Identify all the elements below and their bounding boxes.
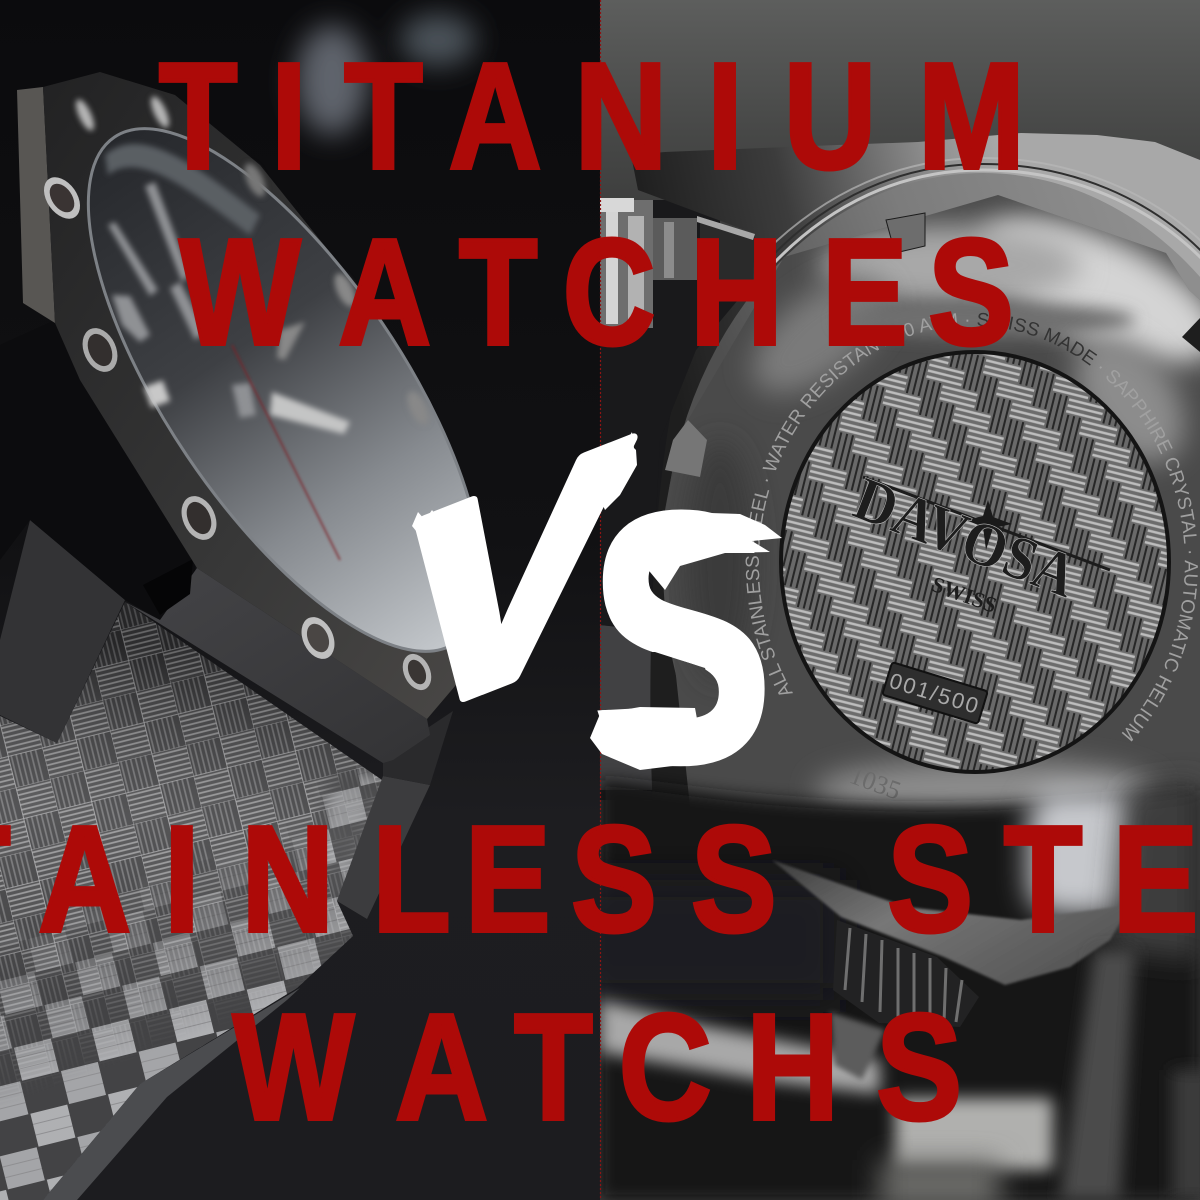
lower bracelet piece [600,625,652,790]
title line one: TITANIUM [159,31,1025,200]
brush tail of the S [640,512,782,590]
red seconds hand [232,345,340,560]
dark left backdrop [600,200,720,800]
black case side [30,520,166,620]
brushed case back [650,188,1200,910]
brand mark: DAVOSA [845,465,1086,611]
engraved reference number: 1035 [846,760,905,805]
side notch [1182,318,1200,352]
inner sandblasted ring [664,173,1200,675]
blurred background highlights [296,14,476,135]
edition plate: 001/500 [886,668,983,719]
lower light patch [895,1098,1053,1170]
dial markers, blurred [105,144,350,434]
outer brushed case [632,133,1200,790]
far right blurred stripe [1172,1070,1200,1200]
lower bezel band [125,568,430,763]
lower lug shadow [383,711,453,785]
crown [830,920,979,1080]
title: Stainless Steel Watchs [0,794,1200,1151]
fade below the light patch [880,1160,1000,1200]
title line four: WATCHS [233,982,962,1151]
brushed case lower edge [772,860,1130,985]
right blurred stripes [1060,950,1135,1200]
title line two: WATCHES [179,207,1014,376]
lower dark area [600,780,1200,1200]
watch strap with woven pattern [0,600,400,1200]
side tab of case [665,420,707,477]
title: Titanium Watches [159,31,1025,376]
right half: stainless steel watch photo [600,0,1200,1200]
bright blurred patch right of the case [1028,790,1150,915]
bezel [43,72,482,719]
letter V: V [373,376,645,791]
letter S: S [590,444,771,833]
crystal and dial [86,127,470,653]
VS brush lettering [373,376,782,833]
strap edge band [43,988,300,1200]
side stripe of the case [17,87,55,323]
centre dotted divider [600,0,602,1200]
right blurred shoulder [1110,780,1200,960]
woven center plate [779,350,1171,774]
bezel screws [44,93,432,690]
black block [150,560,192,614]
engraved ring text: ALL STAINLESS STEEL · WATER RESISTANT 50 ATM · SWISS MADE · SAPPHIRE CRYSTAL · AUTOMATIC HELIUM [746,312,1198,742]
lower lug [337,776,430,919]
diagonal white band [600,1000,880,1094]
black recess beside case [602,302,736,626]
left lug [0,520,125,743]
brand mark: SWISS [928,571,1000,618]
mid dark grey around crown [600,886,834,994]
left half: titanium watch photo [0,0,600,1200]
bracelet link highlights [600,198,755,328]
rounded brush foot of the S [590,707,705,770]
case back notch [886,213,925,253]
ring groove arcs [765,158,1200,262]
